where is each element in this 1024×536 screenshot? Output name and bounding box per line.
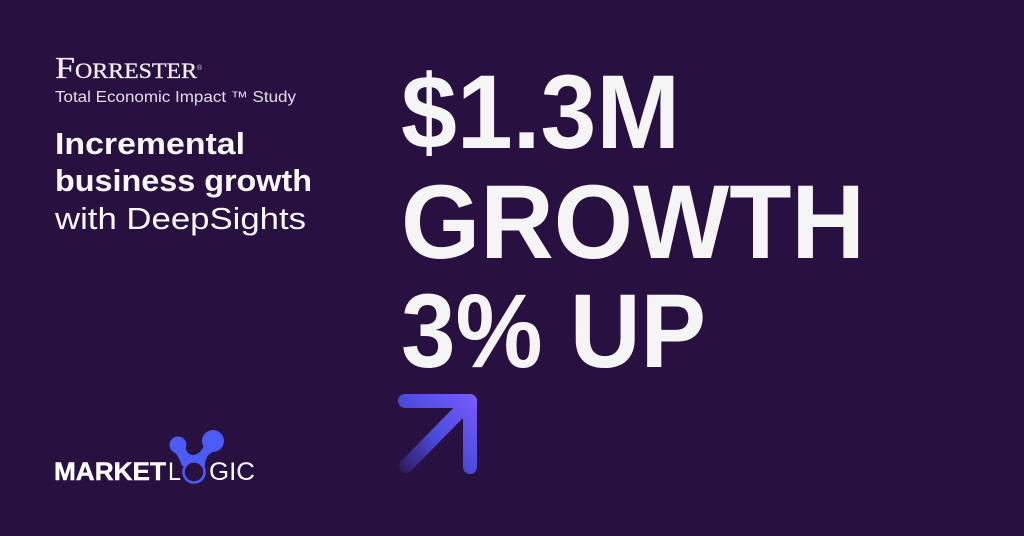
description text — [54, 126, 312, 236]
Forrester logo: F — [55, 50, 75, 85]
study subtitle: Total Economic Impact ™ Study — [55, 89, 296, 106]
Market Logic logo: L — [168, 458, 181, 486]
headline statistic: GROWTH — [401, 164, 865, 281]
headline statistic: 3% UP — [401, 273, 706, 390]
Forrester logo: ORRESTER — [75, 58, 197, 83]
headline statistic — [401, 54, 865, 390]
Market Logic logo: MARKET — [54, 458, 166, 486]
Market Logic logo: GIC — [209, 458, 255, 486]
description text: Incremental — [55, 126, 245, 161]
description text: business growth — [55, 163, 312, 198]
Forrester logo: ® — [197, 64, 203, 72]
Market Logic logo — [54, 430, 255, 486]
description text: with DeepSights — [54, 201, 306, 236]
Forrester logo — [55, 50, 203, 85]
icon: up-right arrow — [405, 401, 470, 467]
headline statistic: $1.3M — [401, 54, 680, 171]
